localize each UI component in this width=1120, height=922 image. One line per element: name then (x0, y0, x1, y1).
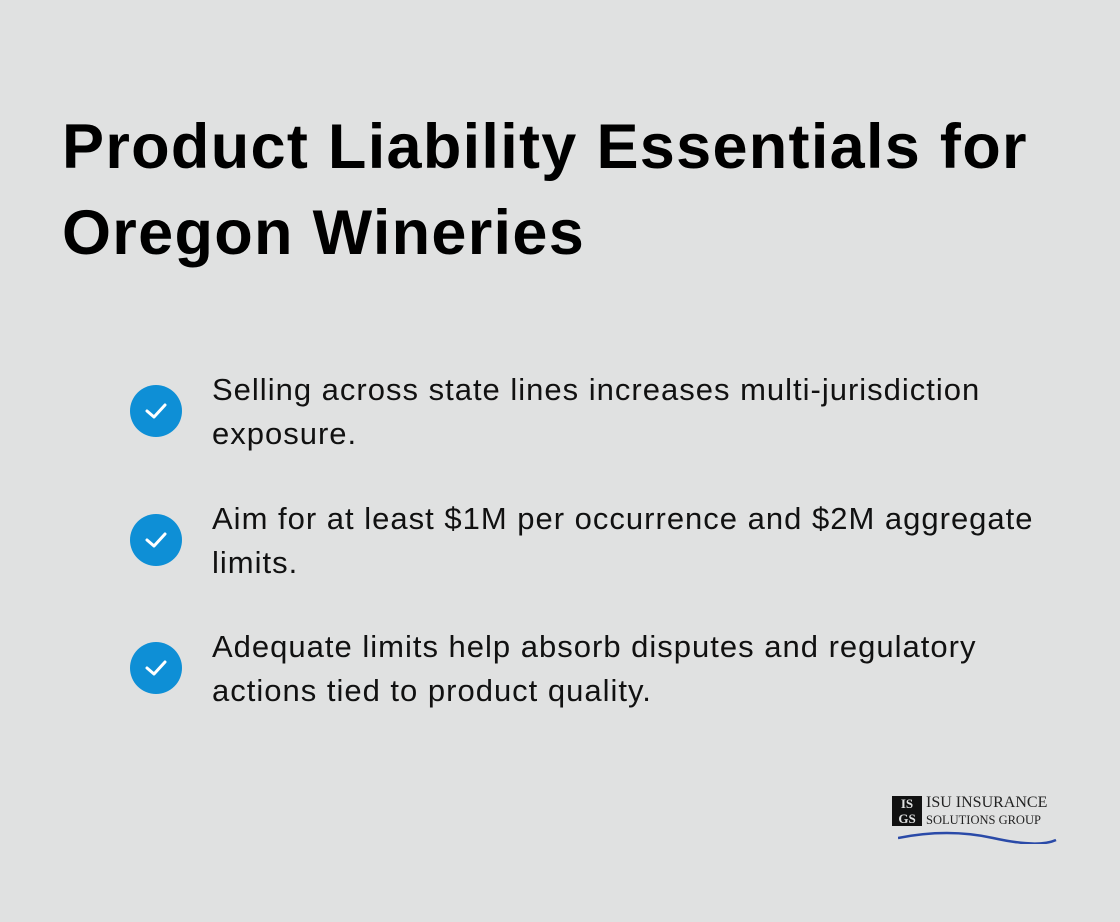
text 1: Selling across state lines increases multi-jurisdiction (212, 372, 980, 407)
logo swoosh (898, 832, 1056, 844)
logo mark: GS (898, 811, 916, 826)
icon: check (130, 642, 182, 694)
text 3: actions tied to product quality. (212, 673, 652, 708)
icon: check (130, 385, 182, 437)
logo text: SOLUTIONS GROUP (926, 813, 1041, 827)
text 2: limits. (212, 545, 298, 580)
item 3 (130, 629, 976, 708)
text 1 (212, 372, 980, 451)
logo text: ISU INSURANCE (926, 794, 1047, 811)
logo mark: IS (901, 796, 913, 811)
title: Product Liability Essentials for (62, 112, 1028, 182)
title: Oregon Wineries (62, 198, 585, 268)
text 2: Aim for at least $1M per occurrence and $2M aggregate (212, 501, 1034, 536)
logo mark (892, 796, 922, 826)
icon: check (130, 514, 182, 566)
text 1: exposure. (212, 416, 357, 451)
logo (892, 794, 1056, 844)
text 3: Adequate limits help absorb disputes and regulatory (212, 629, 976, 664)
logo text (926, 794, 1047, 827)
item 2 (130, 501, 1034, 580)
text 2 (212, 501, 1034, 580)
item 1 (130, 372, 980, 451)
title (62, 112, 1028, 268)
text 3 (212, 629, 976, 708)
